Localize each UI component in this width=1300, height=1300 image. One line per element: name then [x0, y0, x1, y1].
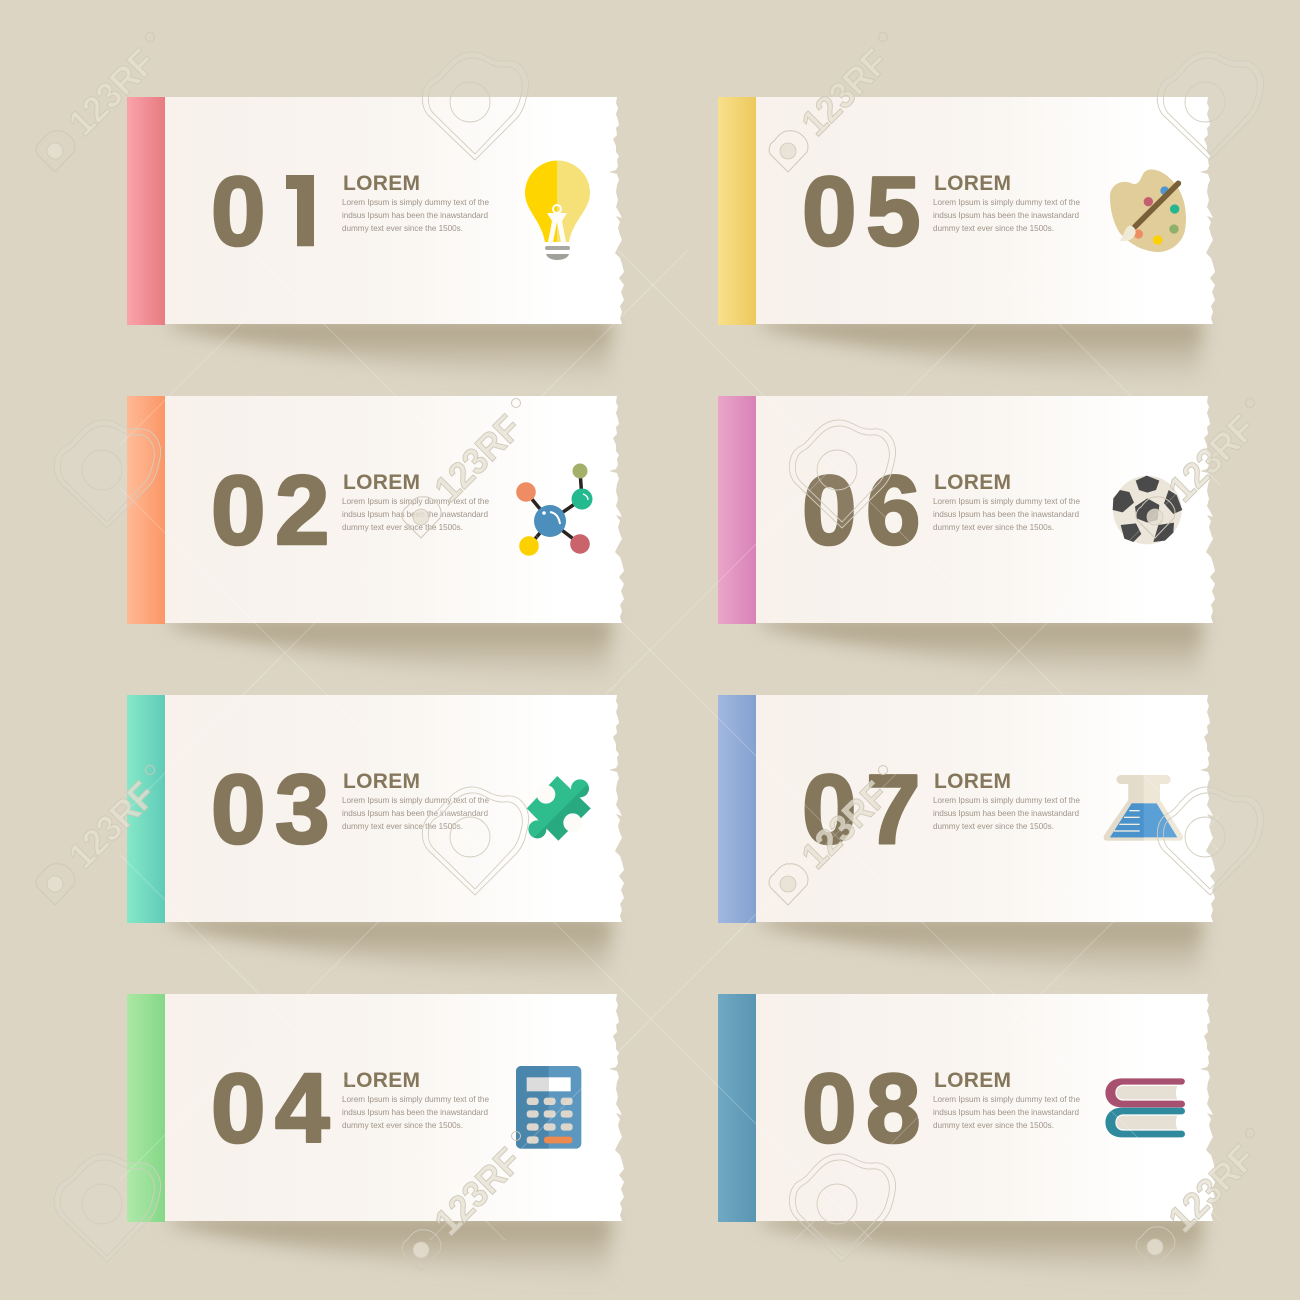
icon: stacked books	[1105, 1078, 1185, 1137]
card 05: 5	[866, 156, 921, 266]
card 06: Lorem Ipsum is simply dummy text of the	[933, 497, 1080, 506]
card 08: dummy text ever since the 1500s.	[933, 1121, 1054, 1130]
card 02: dummy text ever since the 1500s.	[342, 523, 463, 532]
card 08: indsus Ipsum has been the inawstandard	[933, 1108, 1079, 1117]
card 08: LOREM	[934, 1069, 1011, 1092]
card 06: LOREM	[934, 471, 1011, 494]
card 07	[718, 695, 1215, 982]
card 04: 4	[275, 1053, 330, 1163]
card 05: indsus Ipsum has been the inawstandard	[933, 211, 1079, 220]
card 06: indsus Ipsum has been the inawstandard	[933, 510, 1079, 519]
card 08: Lorem Ipsum is simply dummy text of the	[933, 1095, 1080, 1104]
card 03: LOREM	[343, 770, 420, 793]
card 07: 7	[866, 754, 921, 864]
card 08: 0	[802, 1053, 857, 1163]
card 06: 6	[866, 455, 921, 565]
card 01: 1	[273, 156, 328, 266]
card 01: Lorem Ipsum is simply dummy text of the	[342, 198, 489, 207]
card 07: Lorem Ipsum is simply dummy text of the	[933, 796, 1080, 805]
card 07: LOREM	[934, 770, 1011, 793]
card 02: Lorem Ipsum is simply dummy text of the	[342, 497, 489, 506]
card 04: indsus Ipsum has been the inawstandard	[342, 1108, 488, 1117]
card 01: LOREM	[343, 172, 420, 195]
card 05: 0	[802, 156, 857, 266]
card 04: Lorem Ipsum is simply dummy text of the	[342, 1095, 489, 1104]
card 05	[718, 97, 1215, 384]
card 08	[718, 994, 1215, 1281]
card 03: Lorem Ipsum is simply dummy text of the	[342, 796, 489, 805]
card 01: indsus Ipsum has been the inawstandard	[342, 211, 488, 220]
card 07: 0	[802, 754, 857, 864]
card 05: dummy text ever since the 1500s.	[933, 224, 1054, 233]
card 06: dummy text ever since the 1500s.	[933, 523, 1054, 532]
icon: molecule	[516, 464, 592, 556]
card 02: LOREM	[343, 471, 420, 494]
card 01	[127, 97, 624, 384]
card 03	[127, 695, 624, 982]
icon: lab flask	[1104, 775, 1183, 841]
card 04: dummy text ever since the 1500s.	[342, 1121, 463, 1130]
card 05: LOREM	[934, 172, 1011, 195]
card 07: dummy text ever since the 1500s.	[933, 822, 1054, 831]
card 03: indsus Ipsum has been the inawstandard	[342, 809, 488, 818]
card 04	[127, 994, 624, 1281]
card 03: 0	[211, 754, 266, 864]
card 04: 0	[211, 1053, 266, 1163]
card 03: dummy text ever since the 1500s.	[342, 822, 463, 831]
icon: soccer ball	[1113, 476, 1182, 544]
card 01: dummy text ever since the 1500s.	[342, 224, 463, 233]
card 02: indsus Ipsum has been the inawstandard	[342, 510, 488, 519]
icon: paint palette	[1110, 169, 1186, 252]
card 01: 0	[211, 156, 266, 266]
card 06: 0	[802, 455, 857, 565]
card 02	[127, 396, 624, 683]
card 06	[718, 396, 1215, 683]
icon: puzzle piece	[527, 776, 591, 841]
icon: calculator	[516, 1066, 581, 1149]
card 07: indsus Ipsum has been the inawstandard	[933, 809, 1079, 818]
card 08: 8	[866, 1053, 921, 1163]
card 02: 2	[275, 455, 330, 565]
card 05: Lorem Ipsum is simply dummy text of the	[933, 198, 1080, 207]
icon: light bulb	[525, 161, 590, 260]
card 02: 0	[211, 455, 266, 565]
card 04: LOREM	[343, 1069, 420, 1092]
card 03: 3	[275, 754, 330, 864]
